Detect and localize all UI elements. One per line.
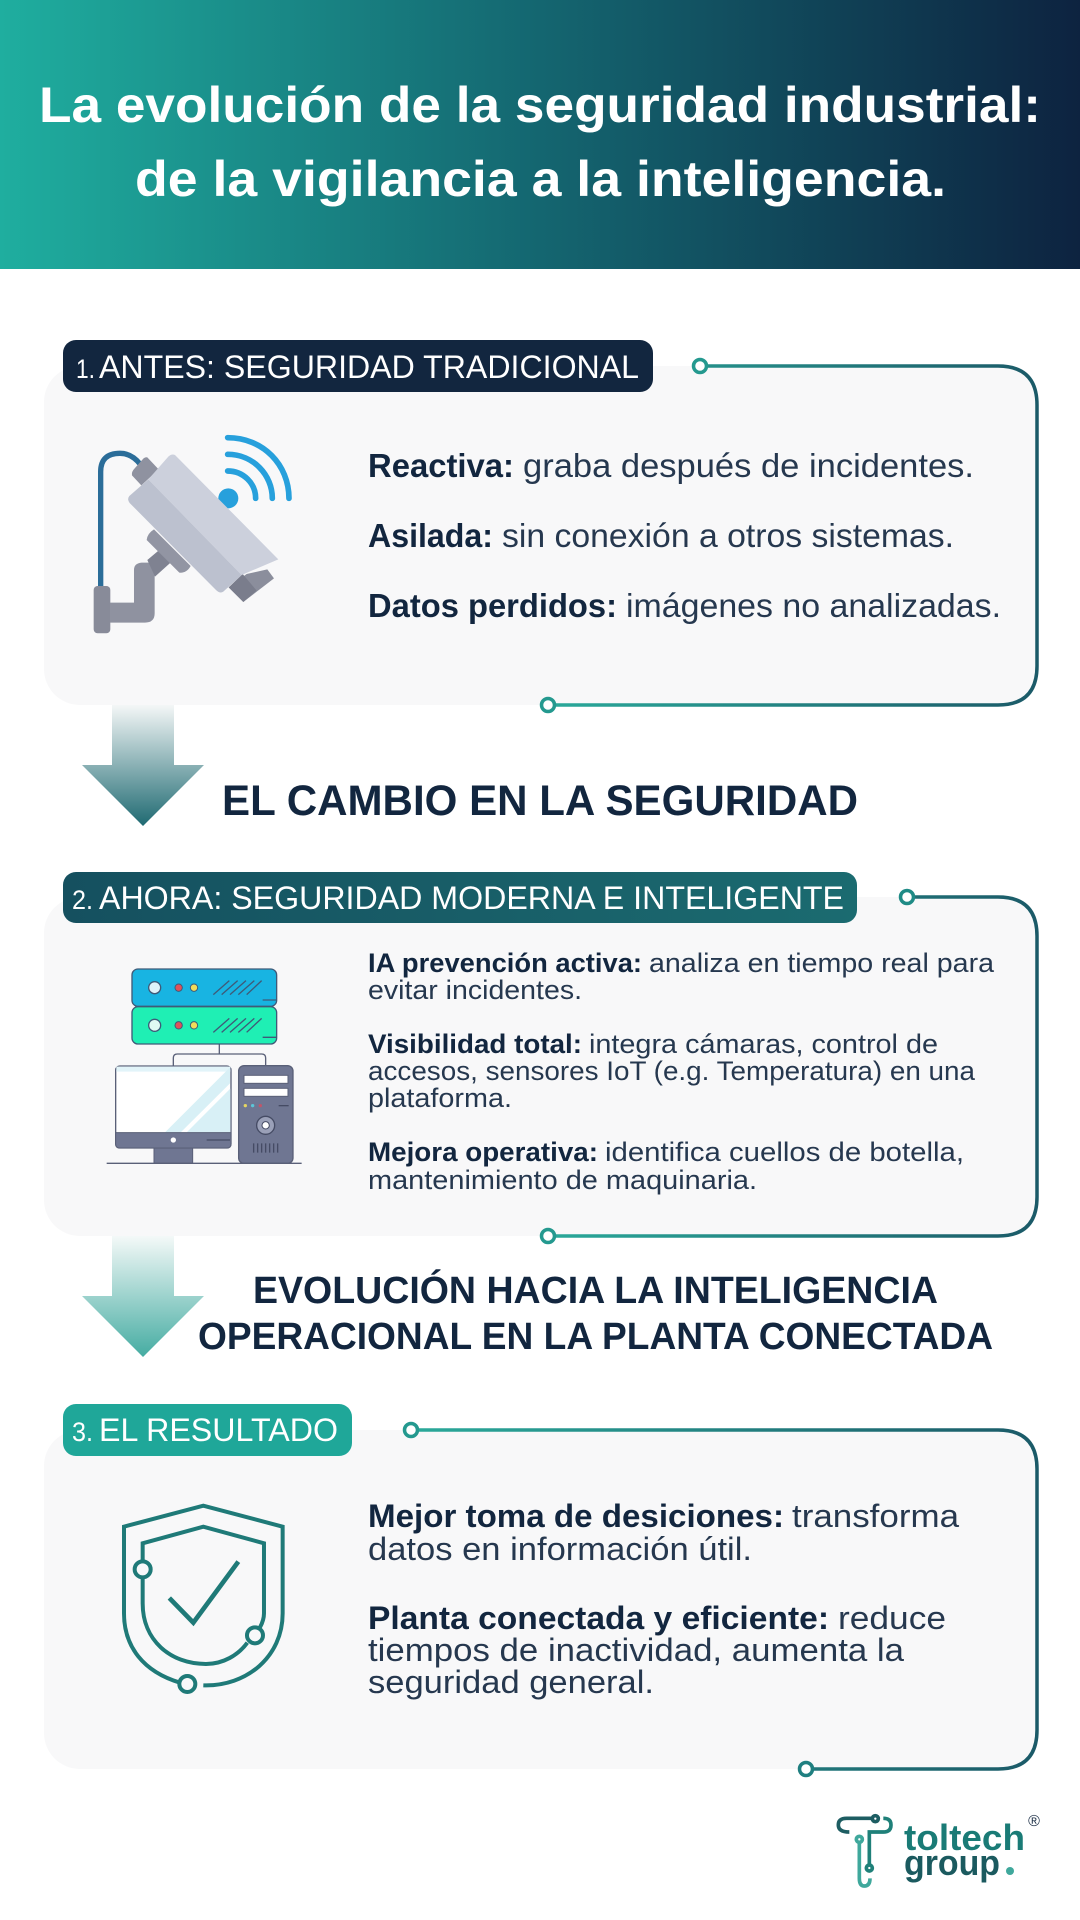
text: ahora: integra cámaras, control de	[589, 1029, 938, 1059]
text: resultado: Mejor toma de desiciones:	[368, 1498, 784, 1534]
section label 2: 2.	[72, 885, 93, 915]
title: de la vigilancia a la inteligencia.	[135, 151, 946, 207]
text: ahora: identifica cuellos de botella,	[605, 1137, 964, 1167]
connector frame	[542, 890, 1037, 1242]
text: antes: Datos perdidos:	[368, 587, 617, 624]
text: resultado: seguridad general.	[368, 1664, 654, 1700]
text: antes: graba después de incidentes.	[523, 447, 974, 484]
title: La evolución de la seguridad industrial:	[39, 77, 1041, 133]
section label 3	[63, 1404, 352, 1456]
text: antes: imágenes no analizadas.	[626, 587, 1001, 624]
arrow 2	[82, 1236, 204, 1357]
section label 3: EL RESULTADO	[99, 1412, 338, 1448]
logo mark	[838, 1816, 891, 1886]
section label 1: 1.	[76, 354, 95, 384]
icon: shield with check	[124, 1506, 283, 1692]
text: ahora: analiza en tiempo real para	[649, 948, 995, 978]
panel: ahora	[44, 872, 1038, 1242]
text: ahora: mantenimiento de maquinaria.	[368, 1165, 757, 1195]
section label 3: 3.	[72, 1417, 93, 1447]
title	[39, 77, 1041, 207]
heading: evolucion	[198, 1268, 993, 1358]
text: resultado: datos en información útil.	[368, 1531, 752, 1567]
icon: security camera with wifi	[94, 438, 289, 633]
text: resultado: reduce	[838, 1600, 946, 1636]
logo: toltech group: ®	[1028, 1813, 1040, 1830]
text: antes: Asilada:	[368, 517, 493, 554]
text: ahora: Mejora operativa:	[368, 1137, 598, 1167]
heading: evolucion: EVOLUCIÓN HACIA LA INTELIGENCIA	[253, 1268, 938, 1312]
arrow 1	[82, 705, 204, 826]
text: ahora	[368, 948, 995, 1195]
text: resultado	[368, 1498, 959, 1700]
panel: resultado	[44, 1404, 1038, 1776]
heading: evolucion: OPERACIONAL EN LA PLANTA CONECTADA	[198, 1316, 993, 1358]
section label 1	[63, 340, 653, 392]
text: ahora: Visibilidad total:	[368, 1029, 582, 1059]
text: ahora: IA prevención activa:	[368, 948, 642, 978]
text: resultado: transforma	[792, 1498, 959, 1534]
section label 2	[63, 872, 857, 923]
logo: toltech group: group	[904, 1842, 1000, 1883]
panel: antes	[44, 340, 1038, 712]
text: antes: sin conexión a otros sistemas.	[502, 517, 954, 554]
text: resultado: tiempos de inactividad, aumenta la	[368, 1632, 904, 1668]
connector frame	[542, 360, 1037, 712]
text: antes: Reactiva:	[368, 447, 514, 484]
logo: toltech group	[838, 1813, 1040, 1886]
text: resultado: Planta conectada y eficiente:	[368, 1600, 829, 1636]
header banner	[0, 0, 1080, 269]
text: ahora: evitar incidentes.	[368, 975, 582, 1005]
text: antes	[368, 447, 1001, 624]
text: ahora: accesos, sensores IoT (e.g. Temperatura) en una	[368, 1056, 976, 1086]
icon: servers and computer	[107, 969, 302, 1163]
logo wordmark: toltech	[904, 1817, 1025, 1858]
section label 1: ANTES: SEGURIDAD TRADICIONAL	[99, 349, 639, 385]
connector frame	[404, 1424, 1037, 1776]
section label 2: AHORA: SEGURIDAD MODERNA E INTELIGENTE	[99, 880, 844, 916]
text: ahora: plataforma.	[368, 1083, 512, 1113]
heading: el cambio: EL CAMBIO EN LA SEGURIDAD	[222, 777, 858, 825]
